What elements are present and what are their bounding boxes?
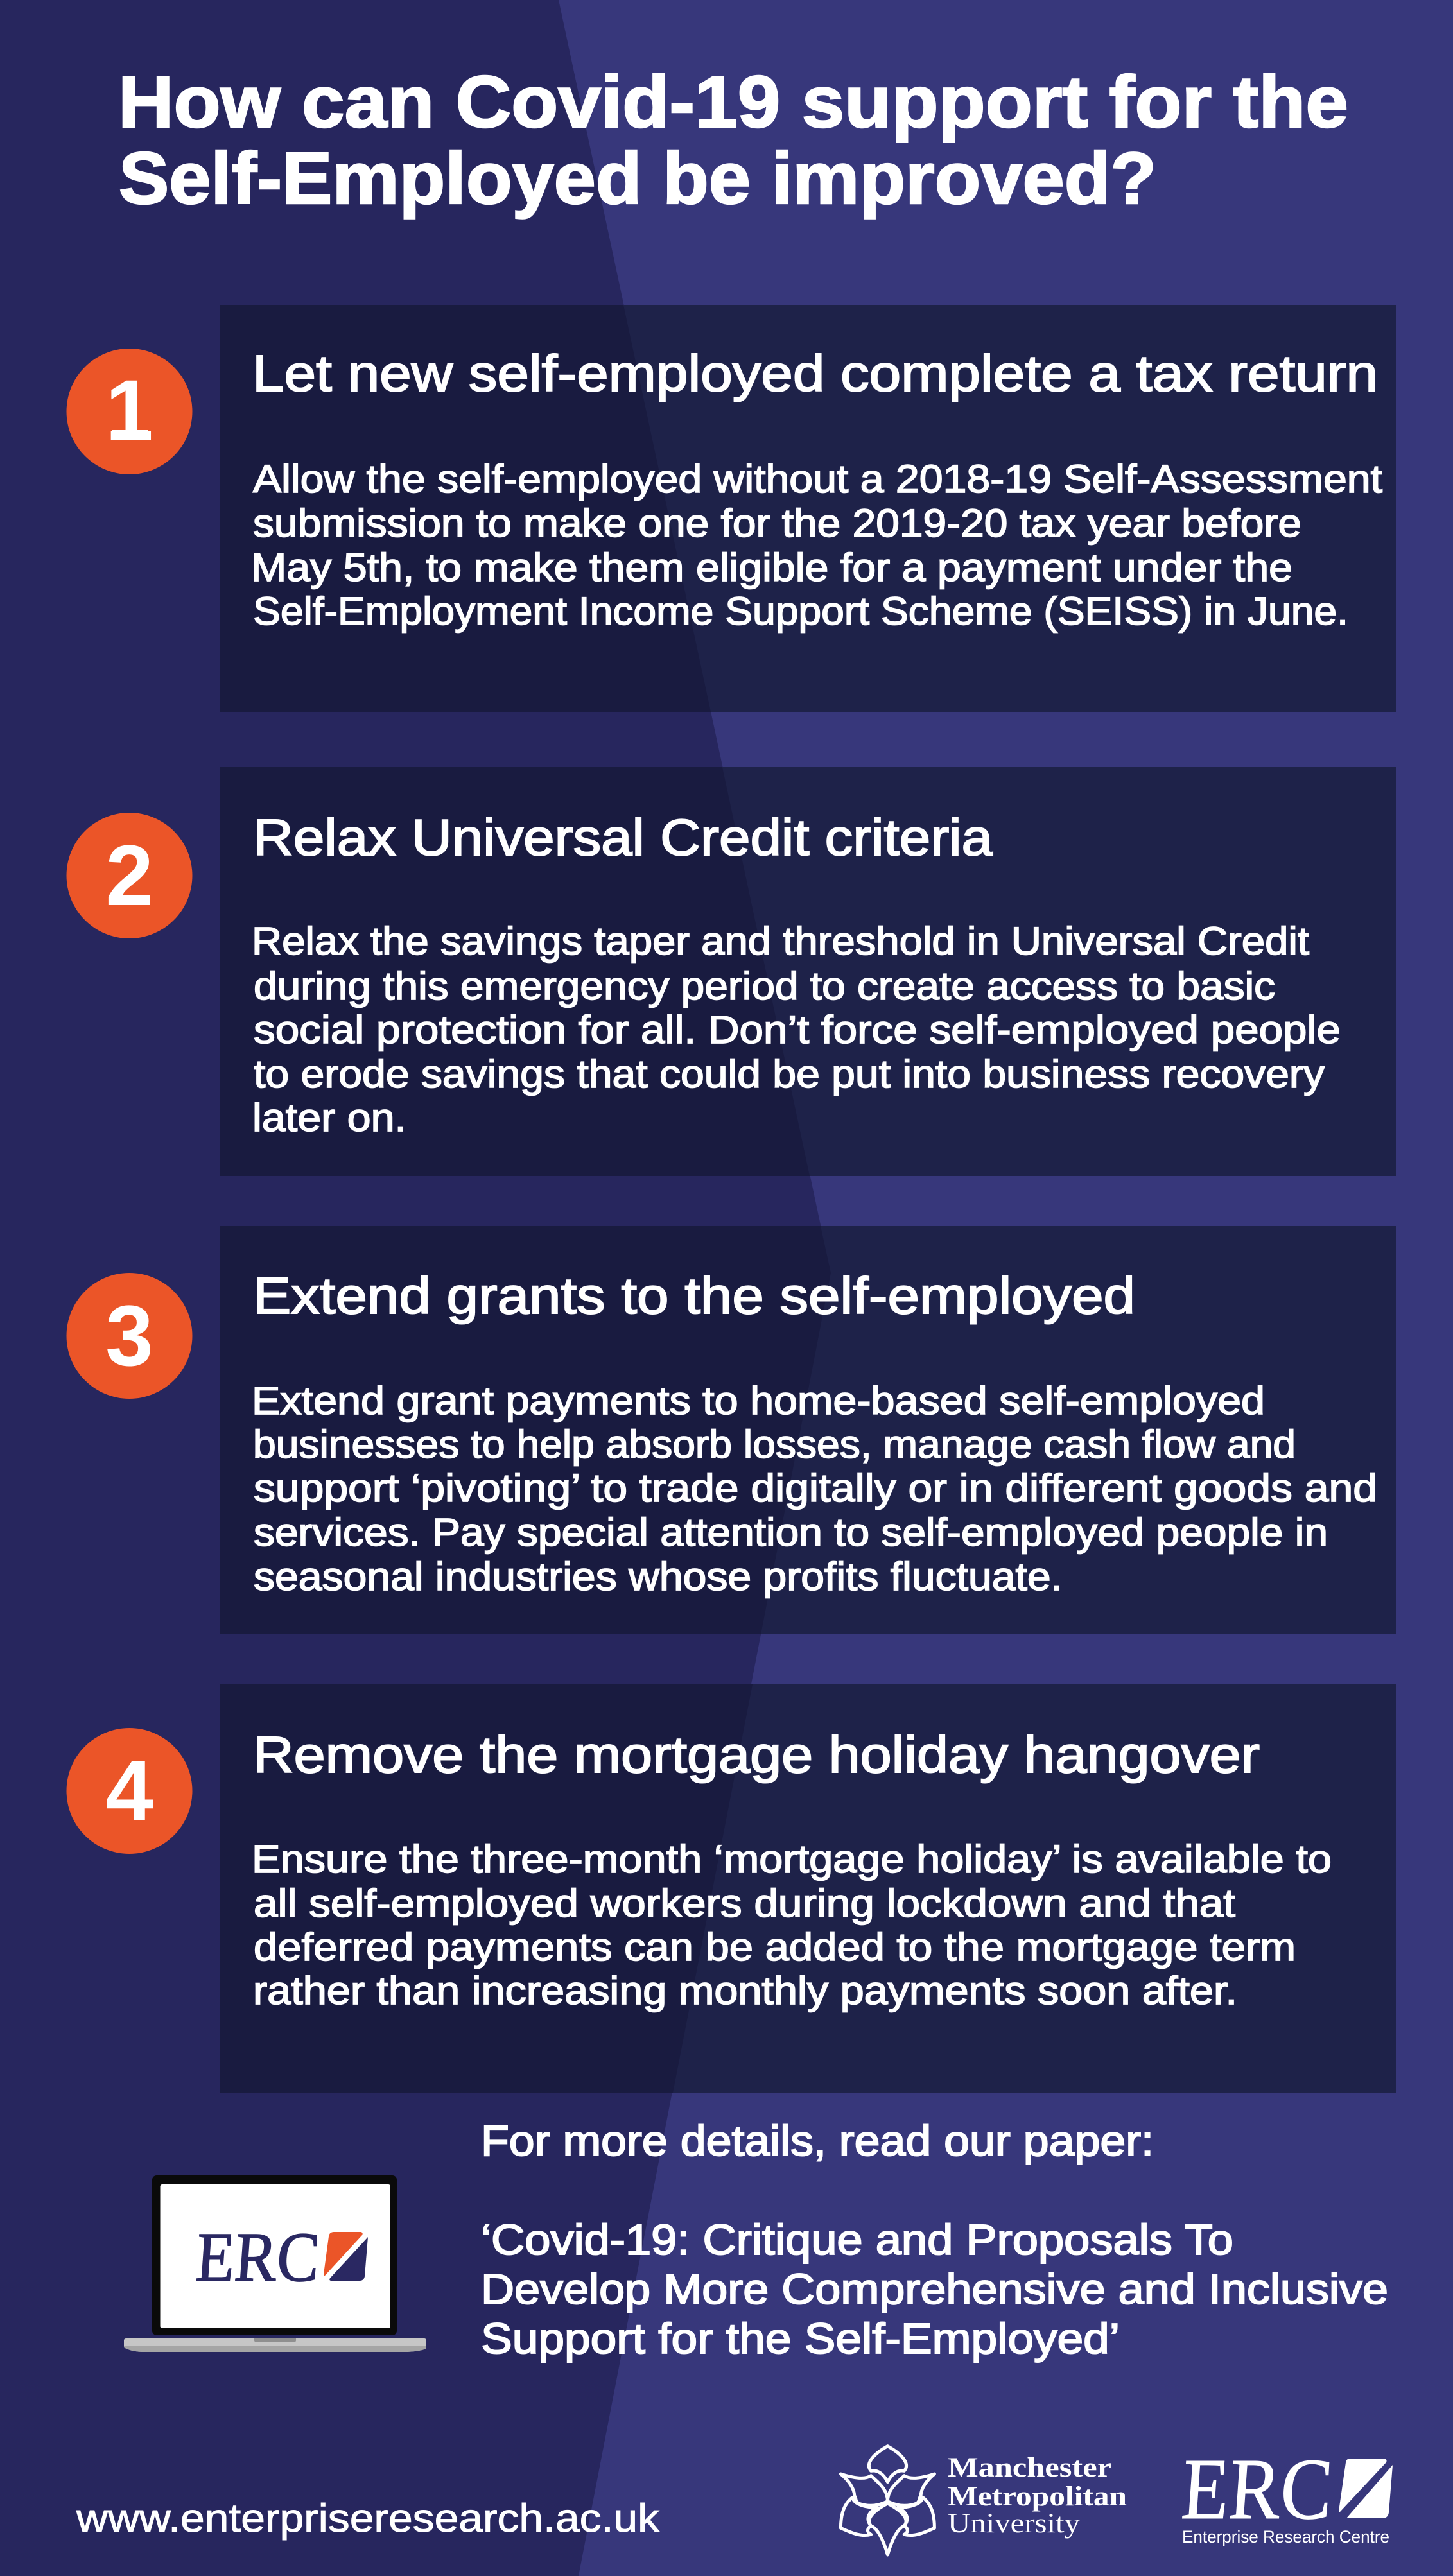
number badge 3 bbox=[67, 1273, 193, 1399]
body text 1: Allow the self-employed without a 2018-19 Self-Assessment bbox=[253, 457, 1382, 501]
body text 2: later on. bbox=[252, 1096, 406, 1139]
icon: MMU flower bbox=[840, 2446, 934, 2555]
body text 3: support ‘pivoting’ to trade digitally or in different goods and bbox=[254, 1466, 1377, 1510]
number badge 1: 1 bbox=[105, 363, 153, 458]
number badge 4 bbox=[67, 1728, 193, 1854]
icon: laptop with ERC logo bbox=[124, 2175, 426, 2352]
body text 2: social protection for all. Don’t force self-employed people bbox=[254, 1008, 1341, 1051]
body text 2: during this emergency period to create access to basic bbox=[254, 964, 1275, 1008]
panel: recommendation 4 bbox=[67, 1684, 1396, 2093]
body text 3: services. Pay special attention to self-employed people in bbox=[254, 1510, 1328, 1554]
logo: Manchester Metropolitan University bbox=[840, 2446, 1127, 2555]
body text 1: submission to make one for the 2019-20 tax year before bbox=[253, 501, 1301, 545]
number badge 2 bbox=[67, 813, 193, 938]
logo: Manchester Metropolitan University: Metropolitan bbox=[948, 2482, 1127, 2512]
paper reference text: For more details, read our paper: bbox=[481, 2117, 1154, 2165]
heading 3: Extend grants to the self-employed bbox=[253, 1267, 1135, 1324]
logo: Manchester Metropolitan University: University bbox=[948, 2509, 1081, 2539]
logo: Enterprise Research Centre: ERC bbox=[1179, 2441, 1336, 2537]
body text 1 bbox=[251, 457, 1382, 633]
title bbox=[118, 62, 1348, 220]
heading 2: Relax Universal Credit criteria bbox=[253, 809, 993, 866]
panel: recommendation 3 bbox=[67, 1226, 1396, 1634]
heading 4: Remove the mortgage holiday hangover bbox=[253, 1726, 1260, 1783]
body text 2: to erode savings that could be put into business recovery bbox=[254, 1052, 1325, 1096]
body text 4: all self-employed workers during lockdown and that bbox=[254, 1881, 1235, 1925]
number badge 3: 3 bbox=[105, 1288, 153, 1384]
logo: Enterprise Research Centre: Enterprise Research Centre bbox=[1182, 2527, 1389, 2546]
body text 1: May 5th, to make them eligible for a payment under the bbox=[251, 546, 1292, 589]
body text 4 bbox=[252, 1837, 1332, 2012]
number badge 1 bbox=[67, 349, 193, 474]
body text 2 bbox=[252, 919, 1341, 1139]
body text 1: Self-Employment Income Support Scheme (SEISS) in June. bbox=[253, 589, 1348, 633]
body text 3 bbox=[252, 1379, 1377, 1598]
title: Self-Employed be improved? bbox=[119, 138, 1156, 220]
panel: recommendation 1 bbox=[67, 305, 1396, 712]
body text 4: Ensure the three-month ‘mortgage holiday’ is available to bbox=[252, 1837, 1332, 1881]
body text 4: rather than increasing monthly payments soon after. bbox=[253, 1969, 1237, 2012]
paper reference text: Develop More Comprehensive and Inclusive bbox=[481, 2265, 1388, 2313]
paper reference text bbox=[481, 2117, 1388, 2363]
number badge 2: 2 bbox=[105, 828, 153, 924]
number badge 4: 4 bbox=[105, 1743, 153, 1839]
body text 3: seasonal industries whose profits fluctuate. bbox=[254, 1555, 1063, 1598]
paper reference text: ‘Covid-19: Critique and Proposals To bbox=[481, 2216, 1233, 2264]
logo: Manchester Metropolitan University: Manchester bbox=[948, 2453, 1111, 2483]
body text 2: Relax the savings taper and threshold in Universal Credit bbox=[252, 919, 1309, 963]
website url: www.enterpriseresearch.ac.uk bbox=[76, 2496, 660, 2541]
body text 3: Extend grant payments to home-based self-employed bbox=[252, 1379, 1265, 1422]
icon: laptop with ERC logo: ERC bbox=[193, 2218, 322, 2296]
body text 3: businesses to help absorb losses, manage cash flow and bbox=[253, 1422, 1296, 1466]
heading 1: Let new self-employed complete a tax return bbox=[252, 345, 1378, 402]
body text 4: deferred payments can be added to the mortgage term bbox=[254, 1925, 1296, 1969]
title: How can Covid-19 support for the bbox=[118, 62, 1348, 143]
panel: recommendation 2 bbox=[67, 767, 1396, 1176]
paper reference text: Support for the Self-Employed’ bbox=[481, 2315, 1120, 2363]
